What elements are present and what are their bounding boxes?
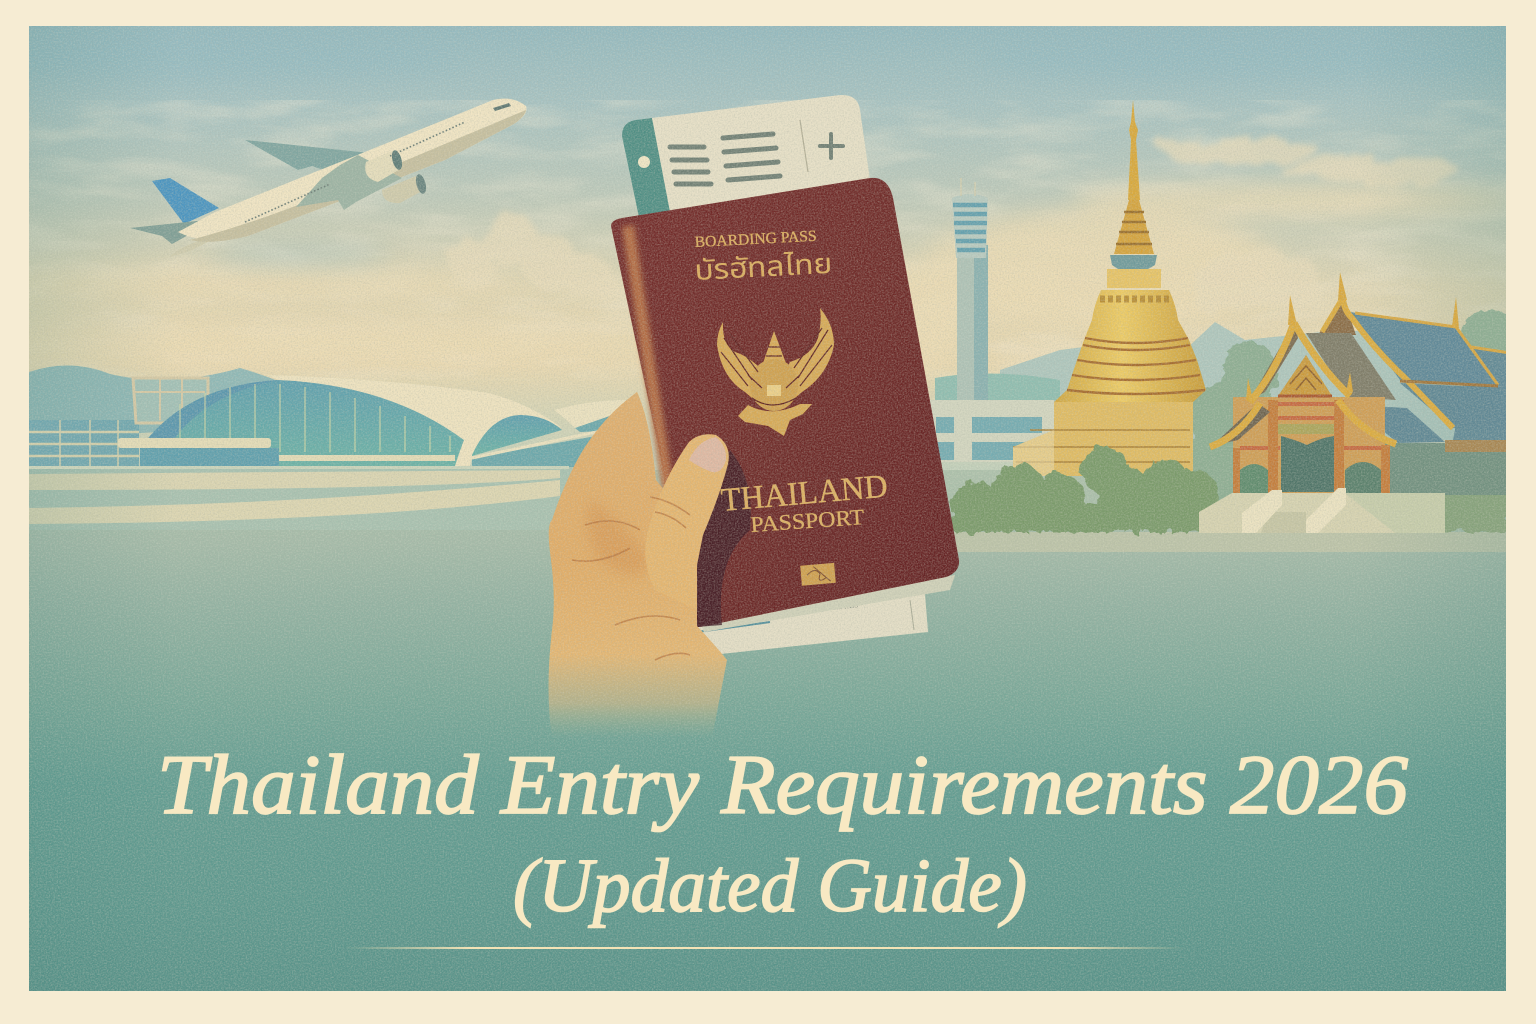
body of temple bbox=[1233, 397, 1385, 493]
main arch glass bbox=[145, 380, 464, 467]
divider rule bbox=[345, 947, 1185, 949]
palm bbox=[548, 392, 727, 738]
passport bbox=[611, 178, 959, 632]
trees behind temple bbox=[1193, 309, 1506, 501]
feather lines bbox=[721, 328, 832, 405]
side arches bbox=[1240, 464, 1268, 493]
lower right roof bbox=[1351, 405, 1445, 443]
finials bbox=[1246, 272, 1459, 405]
second arch glass bbox=[472, 415, 562, 456]
third roof bbox=[554, 400, 627, 428]
spine highlight bbox=[628, 226, 668, 490]
terminal wing building bbox=[29, 378, 208, 467]
doorway bbox=[1281, 436, 1334, 492]
fuselage bbox=[178, 98, 526, 240]
gable triangle bbox=[1278, 355, 1332, 396]
tower base building bbox=[930, 400, 1054, 462]
golden stupa bbox=[1013, 100, 1206, 476]
thumb shadow bbox=[680, 450, 751, 627]
near wing bbox=[296, 155, 402, 210]
thumb bbox=[645, 434, 729, 610]
Thai temple bbox=[1199, 272, 1510, 533]
palm shading bbox=[587, 500, 650, 575]
rear roof upper bbox=[1350, 312, 1470, 383]
tail plane bbox=[130, 220, 199, 244]
lower tail cone bbox=[176, 242, 208, 254]
front roof side bbox=[1306, 333, 1396, 400]
passport country: THAILAND bbox=[720, 469, 889, 519]
rear right hall bbox=[1385, 443, 1510, 495]
title line two: (Updated Guide) bbox=[513, 844, 1027, 928]
boarding pass top bbox=[622, 95, 870, 222]
far right roof bbox=[1453, 347, 1510, 440]
tail fin bbox=[152, 178, 219, 224]
right wing bbox=[782, 308, 834, 398]
boarding pass bottom bbox=[696, 594, 928, 656]
front roof eaves bbox=[1212, 403, 1270, 446]
tail and talons bbox=[738, 404, 812, 436]
thumbnail bbox=[689, 437, 726, 472]
distant mountains bbox=[29, 322, 1506, 440]
control tower bbox=[930, 178, 1054, 462]
chip icon bbox=[800, 563, 836, 586]
airplane bbox=[130, 98, 526, 257]
plinth bbox=[1199, 493, 1445, 533]
rear gable bbox=[1318, 297, 1356, 335]
crown bbox=[762, 331, 787, 366]
body bbox=[750, 359, 798, 411]
Thai passport text: บัรฮัทลไทย bbox=[694, 249, 833, 287]
passport cover bbox=[611, 178, 959, 627]
central stairs bbox=[1261, 512, 1306, 533]
boarding pass bottom: THAILAND PASS bbox=[812, 603, 858, 614]
knuckle lines bbox=[572, 497, 690, 660]
passport pages edge bbox=[700, 575, 955, 632]
passport label: PASSPORT bbox=[750, 504, 866, 537]
white roof crescent bbox=[267, 375, 562, 466]
passport heading: BOARDING PASS bbox=[694, 228, 817, 251]
garuda emblem bbox=[717, 308, 834, 436]
canopies bbox=[118, 438, 271, 448]
airport terminal bbox=[29, 375, 630, 469]
left wing bbox=[717, 322, 766, 398]
stair walls bbox=[1242, 488, 1346, 533]
title line one: Thailand Entry Requirements 2026 bbox=[157, 738, 1409, 832]
title bbox=[157, 738, 1409, 928]
cockpit window bbox=[493, 103, 511, 111]
rear roof lower bbox=[1400, 383, 1464, 428]
hand holding passport bbox=[548, 392, 729, 738]
sky bbox=[0, 26, 1530, 476]
far wing bbox=[245, 140, 364, 170]
cabin windows bbox=[245, 122, 465, 222]
pillars bbox=[1233, 400, 1390, 493]
engines bbox=[365, 150, 402, 182]
foreground trees bbox=[951, 446, 1526, 532]
